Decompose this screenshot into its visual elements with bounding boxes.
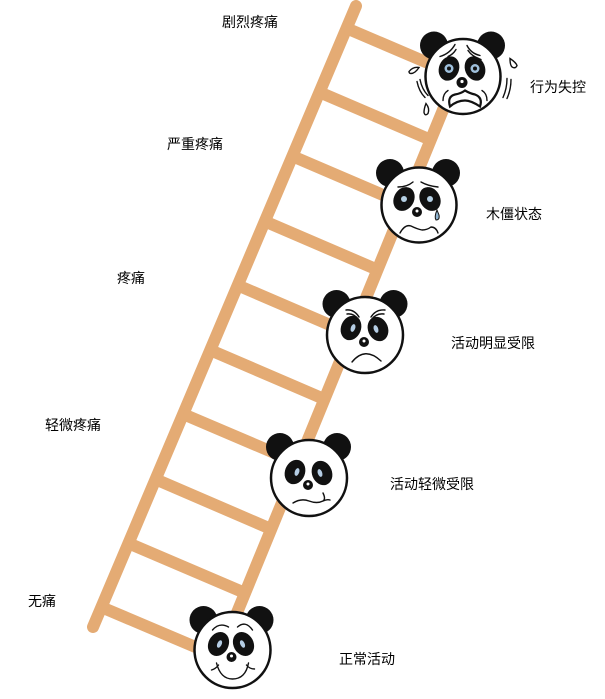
pain labels: 严重疼痛 bbox=[167, 136, 223, 152]
panda: markedly limited bbox=[322, 290, 408, 373]
activity labels: 活动明显受限 bbox=[451, 335, 535, 351]
activity labels: 正常活动 bbox=[339, 651, 395, 667]
pain labels: 疼痛 bbox=[117, 270, 145, 286]
pain labels: 剧烈疼痛 bbox=[222, 14, 278, 30]
activity labels: 木僵状态 bbox=[486, 206, 542, 222]
pain labels: 无痛 bbox=[28, 593, 56, 609]
pain labels: 轻微疼痛 bbox=[45, 417, 101, 433]
panda: no pain, normal activity bbox=[190, 606, 274, 688]
panda: slightly limited bbox=[266, 433, 351, 516]
panda: rigid state bbox=[376, 159, 460, 242]
activity labels bbox=[339, 79, 586, 667]
pain labels bbox=[28, 14, 278, 609]
sweat drops bbox=[409, 58, 517, 115]
ladder bbox=[93, 6, 445, 657]
activity labels: 行为失控 bbox=[530, 79, 586, 95]
activity labels: 活动轻微受限 bbox=[390, 476, 474, 492]
panda: severe pain, loss of control bbox=[409, 32, 517, 115]
